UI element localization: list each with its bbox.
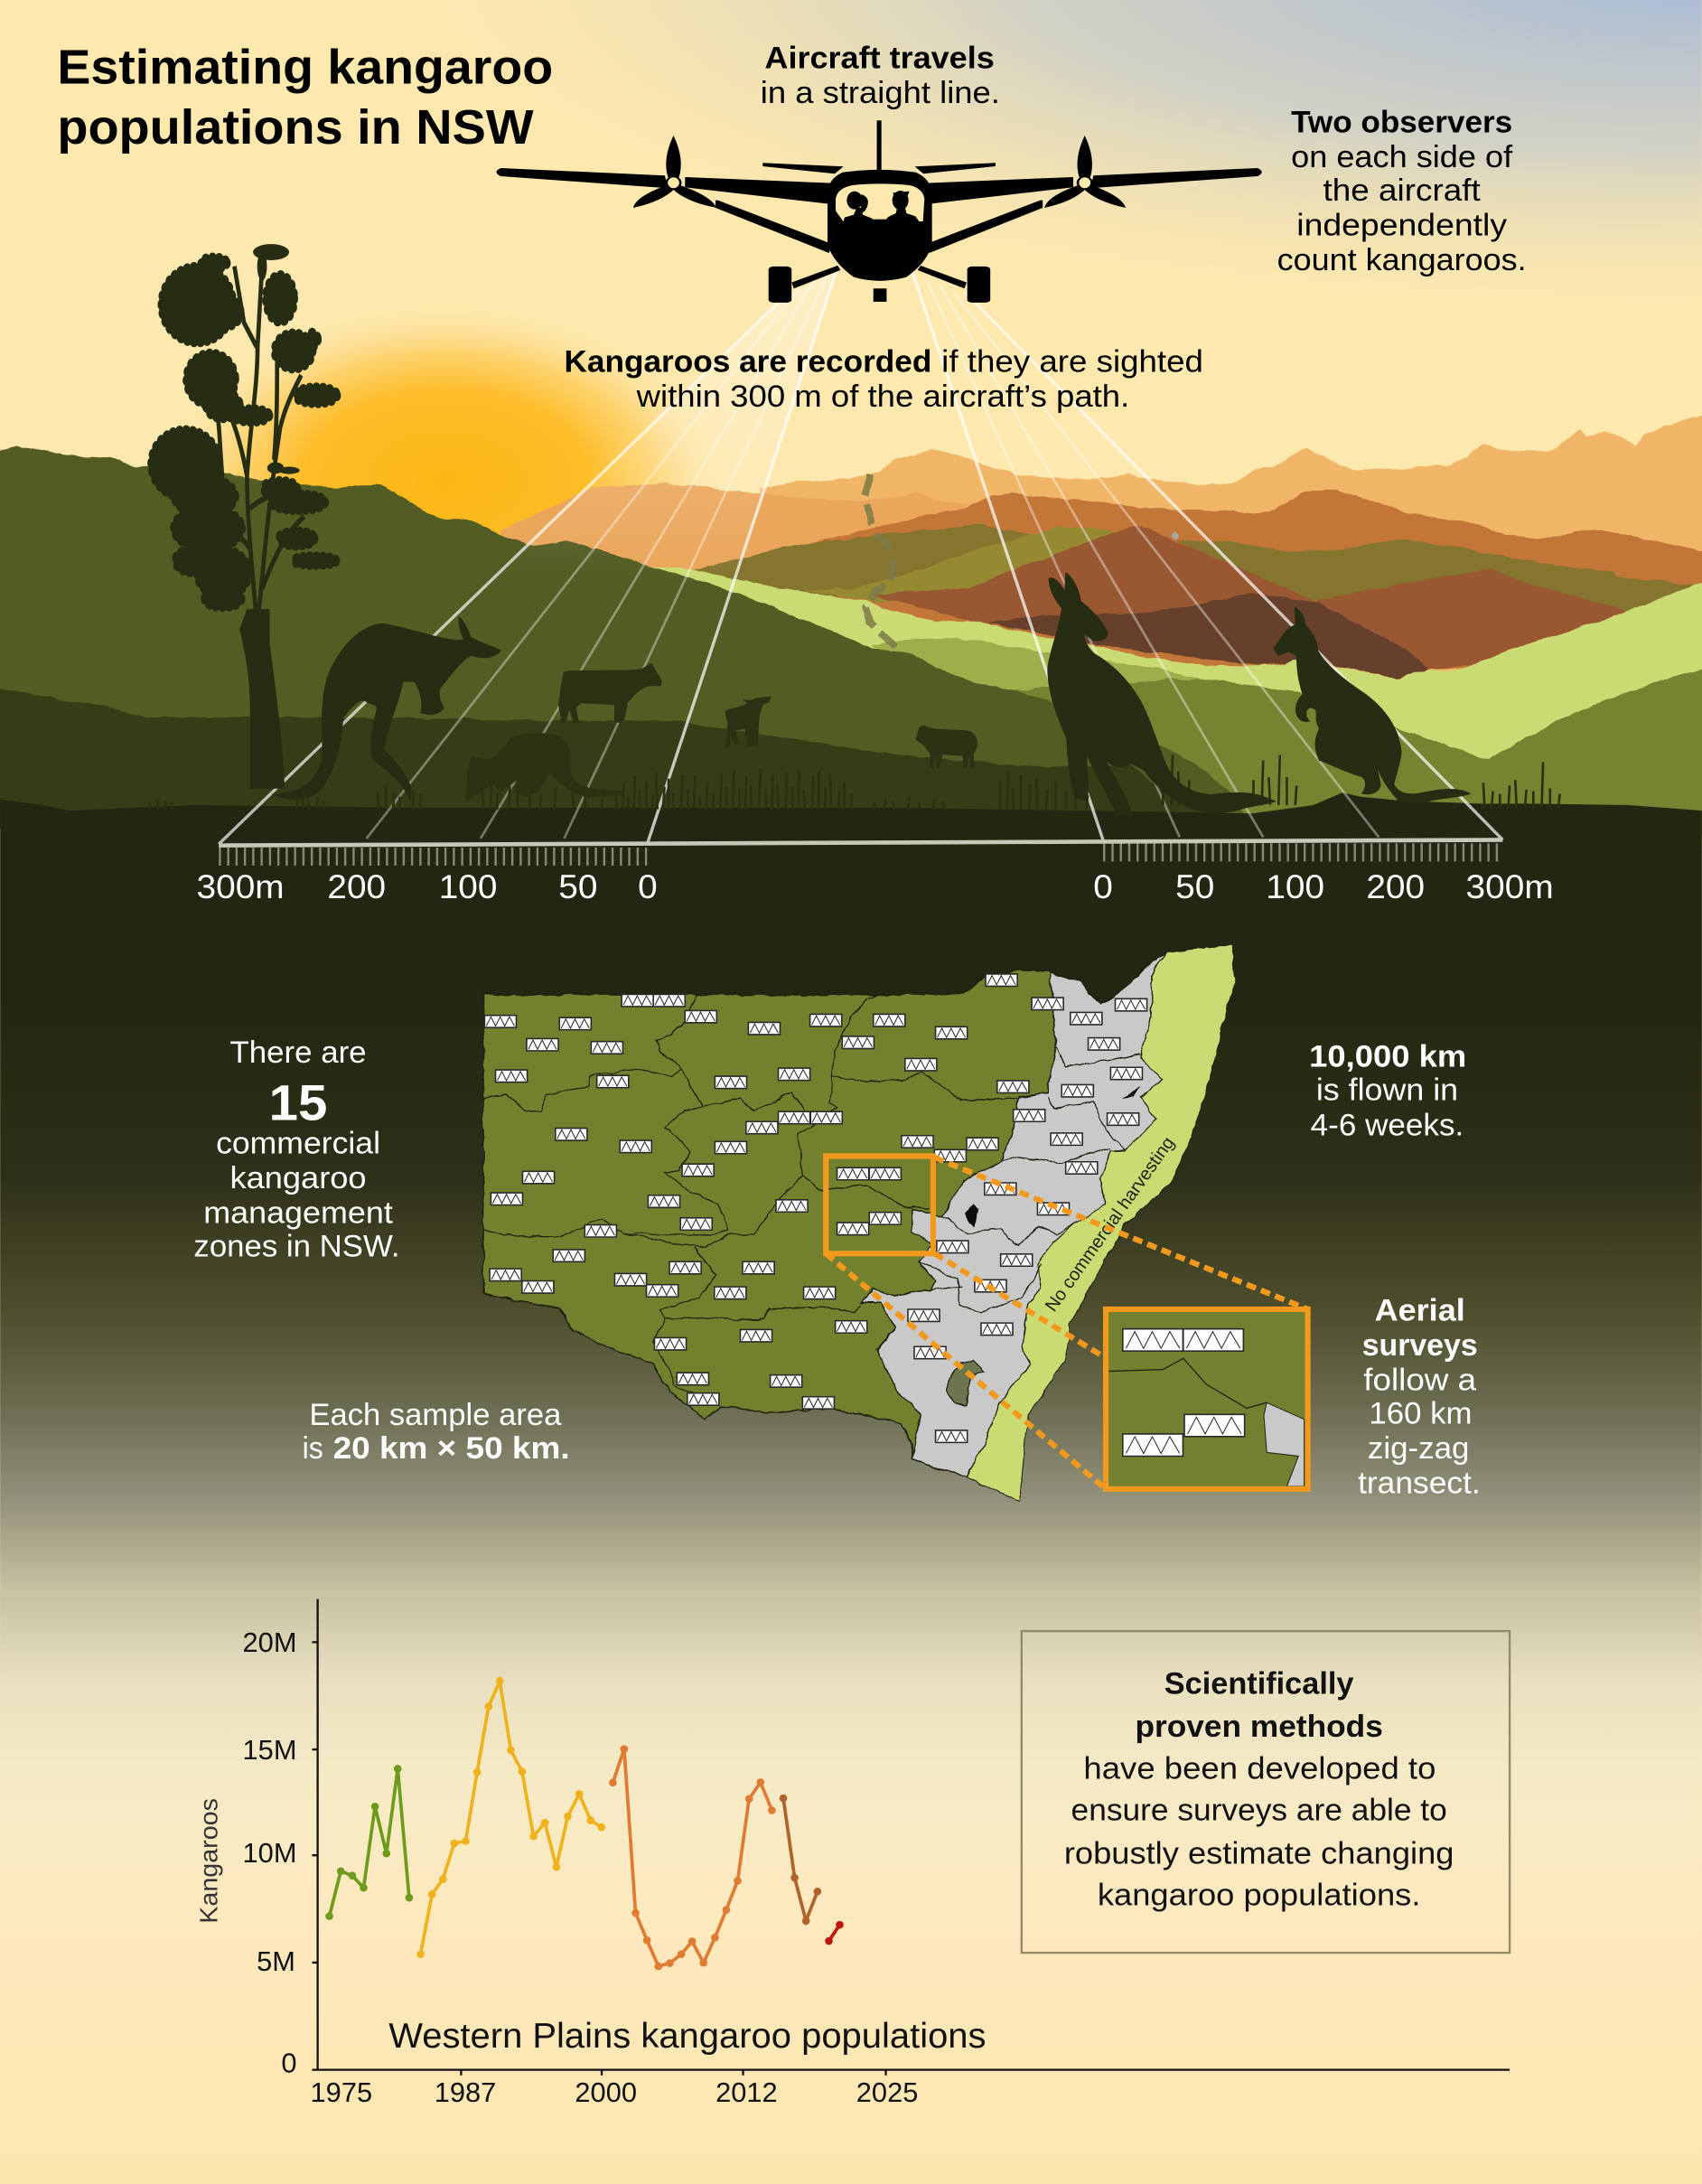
icon: kangaroo hopping left: [271, 616, 501, 802]
line chart: kangaroo populations: [195, 1599, 1510, 2108]
survey transect lines: [219, 269, 1502, 844]
series 1975-1981: [325, 1765, 413, 1920]
text: two observers: independently: [1296, 209, 1507, 243]
x axis labels: 2025: [856, 2076, 918, 2108]
y axis labels: 5M: [257, 1945, 295, 1977]
text: 15 management zones: kangaroo: [230, 1161, 367, 1195]
text: aerial surveys: [1358, 1293, 1481, 1500]
map: sample area markers: [484, 974, 1147, 1442]
title: [57, 40, 553, 155]
callout: scientifically proven methods: have been developed to: [1083, 1751, 1435, 1786]
map: harvesting zones: [483, 951, 1165, 1477]
text: aerial surveys: follow a: [1363, 1363, 1476, 1397]
text: aerial surveys: zig-zag: [1368, 1431, 1469, 1466]
y axis title: Kangaroos: [195, 1798, 223, 1924]
text: sample area: Each sample area: [309, 1398, 562, 1432]
x axis labels: 1987: [435, 2076, 496, 2108]
sun glow: [154, 299, 738, 661]
text: 15 management zones: There are: [230, 1036, 367, 1070]
map: grey non-harvest interior: [861, 951, 1165, 1477]
y axis labels: 15M: [243, 1734, 297, 1766]
text: 15 management zones: management: [203, 1195, 393, 1230]
text: two observers: count kangaroos.: [1277, 243, 1527, 277]
icon: cow: [558, 662, 662, 724]
text: kangaroos are recorded: within 300 m of the aircraft’s path.: [636, 380, 1129, 414]
text: aircraft travels: Aircraft travels: [764, 42, 995, 76]
scale labels: 0: [638, 868, 658, 905]
map label: No commercial harvesting: [1042, 1133, 1179, 1316]
text: aircraft travels: [761, 42, 1000, 110]
text: 15 management zones: commercial: [216, 1126, 380, 1160]
icon: kangaroo standing: [1047, 572, 1276, 816]
callout: scientifically proven methods: kangaroo populations.: [1098, 1879, 1420, 1913]
y axis labels: 0: [281, 2048, 297, 2079]
text: sample area: [303, 1398, 570, 1466]
x axis labels: 2012: [715, 2076, 778, 2108]
text: aerial surveys: transect.: [1358, 1466, 1481, 1500]
distance scale: [197, 839, 1554, 905]
mountain landscape: [0, 409, 1702, 849]
text: aerial surveys: Aerial: [1375, 1293, 1465, 1327]
series 2001-2015: [609, 1745, 776, 1970]
callout: scientifically proven methods: proven methods: [1135, 1710, 1383, 1744]
series 2016-2019: [780, 1795, 821, 1925]
icon: kangaroo with joey: [1273, 607, 1471, 804]
text: kangaroos are recorded: Kangaroos are recorded: [564, 345, 931, 380]
scale labels: 50: [558, 868, 597, 905]
y axis labels: 20M: [243, 1626, 297, 1658]
callout: scientifically proven methods: robustly estimate changing: [1064, 1836, 1454, 1870]
scale labels: 200: [327, 868, 386, 905]
callout: scientifically proven methods: Scientifically: [1164, 1666, 1354, 1701]
propellers: [633, 136, 716, 208]
text: two observers: [1277, 105, 1527, 277]
text: 15 management zones: [193, 1036, 400, 1263]
text: two observers: the aircraft: [1323, 173, 1481, 208]
text: 15 management zones: 15: [269, 1074, 327, 1130]
zoom connector dashes: [826, 1158, 1308, 1489]
grass: [149, 755, 1560, 810]
scale labels: 100: [1266, 868, 1324, 905]
series 1982-2000: [416, 1677, 605, 1958]
aircraft cabin with observers: [828, 170, 932, 281]
ground: [0, 792, 1702, 2184]
map: lakes: [964, 1085, 1143, 1227]
icon: sheep: [915, 726, 977, 769]
scale labels: 200: [1366, 868, 1425, 905]
scale labels: 50: [1175, 868, 1214, 905]
scale labels: 0: [1093, 868, 1113, 905]
map: no commercial harvesting strip: [967, 946, 1234, 1502]
x axis labels: [311, 2076, 918, 2108]
title: Estimating kangaroo: [57, 40, 553, 94]
text: aerial surveys: 160 km: [1369, 1396, 1472, 1430]
text: 15 management zones: zones in NSW.: [193, 1229, 400, 1263]
icon: kangaroo grazing: [465, 733, 622, 801]
text: two observers: Two observers: [1291, 105, 1512, 139]
y axis labels: 10M: [243, 1837, 297, 1869]
icon: tree: [152, 244, 337, 789]
x axis labels: 1975: [311, 2076, 372, 2108]
text: sample area: 20 km × 50 km.: [333, 1431, 570, 1466]
map of NSW: [483, 946, 1234, 1502]
chart title: Western Plains kangaroo populations: [388, 2017, 987, 2056]
x axis labels: 2000: [575, 2076, 637, 2108]
text: aerial surveys: surveys: [1362, 1328, 1478, 1363]
title: populations in NSW: [57, 100, 534, 155]
series 2020-2021: [825, 1921, 844, 1945]
text: 10,000 km: [1309, 1040, 1466, 1142]
zoom source box: [826, 1156, 933, 1253]
scale labels: 300m: [197, 868, 285, 905]
text: 10,000 km: is flown in: [1316, 1073, 1458, 1108]
text: two observers: on each side of: [1291, 140, 1513, 174]
text: sample area: is: [303, 1431, 323, 1466]
callout: scientifically proven methods: ensure surveys are able to: [1071, 1794, 1447, 1828]
text: kangaroos are recorded: if they are sighted: [941, 345, 1203, 380]
text: aircraft travels: in a straight line.: [761, 76, 1000, 110]
icon: goat: [725, 697, 772, 747]
map: zone boundaries: [483, 994, 1143, 1404]
scale labels: 300m: [1466, 868, 1554, 905]
scale labels: [197, 868, 1554, 905]
icon: aircraft: [496, 120, 1262, 303]
callout: scientifically proven methods: [1022, 1631, 1510, 1953]
scale labels: 100: [439, 868, 497, 905]
text: kangaroos are recorded: [564, 345, 1203, 414]
zoom inset: [1106, 1309, 1308, 1489]
y axis labels: [243, 1626, 297, 2079]
dashed track: [865, 474, 1180, 646]
text: 10,000 km: 10,000 km: [1309, 1040, 1466, 1074]
chart axes: [312, 1599, 1510, 2076]
text: 10,000 km: 4-6 weeks.: [1311, 1108, 1464, 1142]
